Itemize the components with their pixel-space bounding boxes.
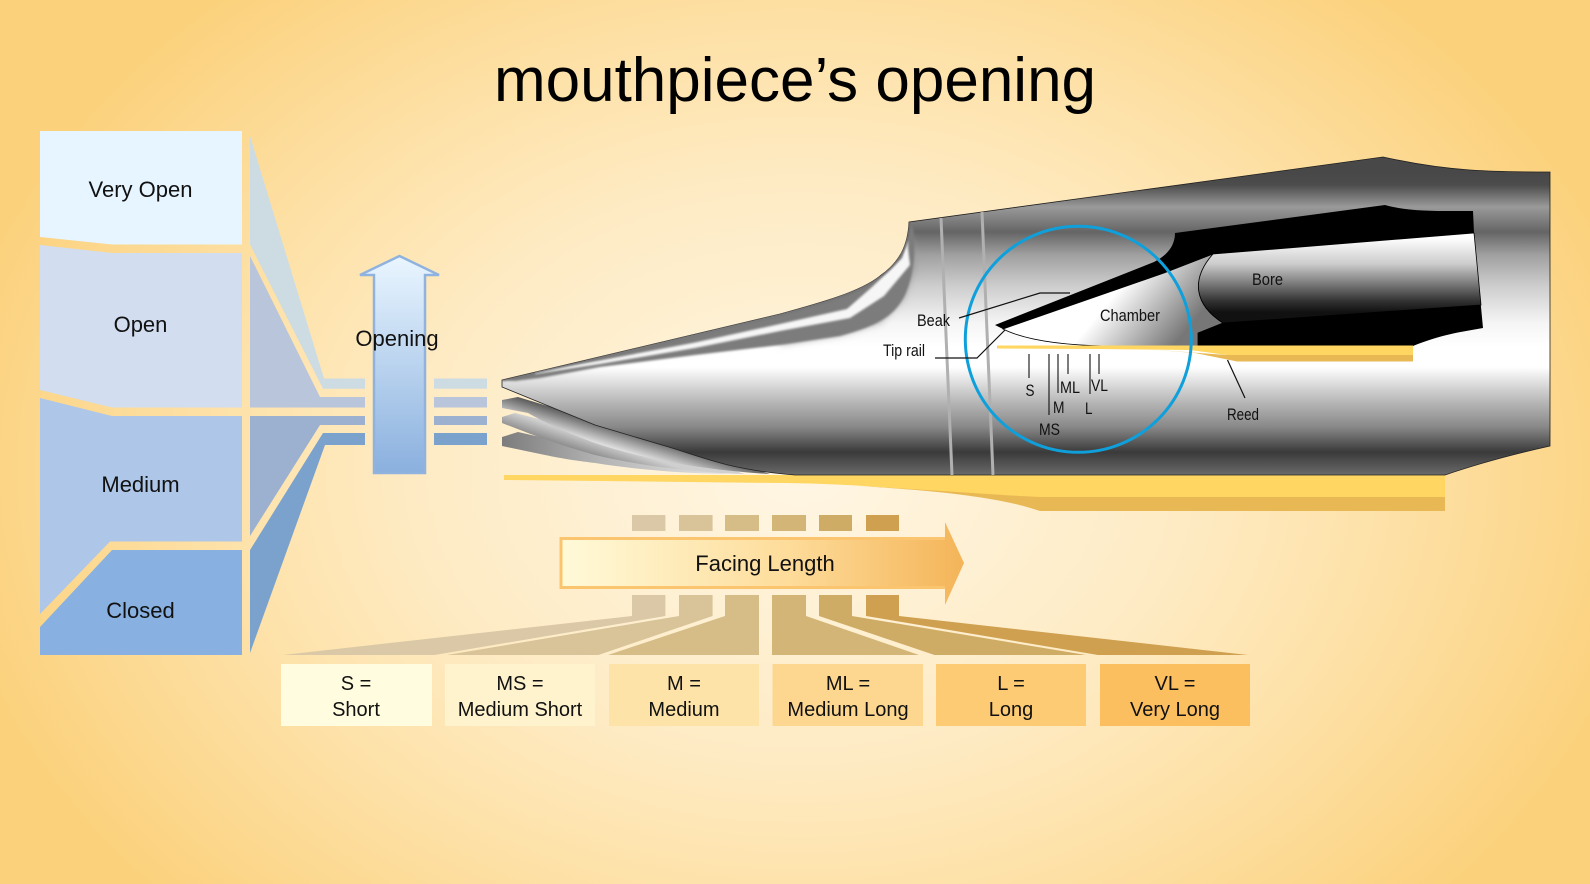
legend: short: S = <box>341 673 371 695</box>
legend: medium long: ML = <box>826 673 870 695</box>
level: open: Open <box>114 312 167 337</box>
arrow: facing length <box>561 522 964 605</box>
level: very open <box>40 131 242 244</box>
top squares <box>632 515 899 531</box>
level: closed <box>40 550 242 655</box>
chamber <box>1003 254 1223 346</box>
beak surface <box>502 222 915 381</box>
legend: medium long <box>772 664 923 726</box>
legend: long <box>936 664 1086 726</box>
arrow: opening: Opening <box>355 326 439 351</box>
legend: short: Short <box>332 699 380 721</box>
facing length ticks: ML <box>1060 378 1080 397</box>
reed: inner <box>997 346 1413 362</box>
callout: beak: Beak <box>917 311 950 330</box>
legend: very long: VL = <box>1155 673 1195 695</box>
legend: medium long: Medium Long <box>787 699 909 721</box>
level: very open: Very Open <box>89 177 192 202</box>
facing length ticks: M <box>1053 398 1064 417</box>
legend: medium: Medium <box>648 699 720 721</box>
legend: medium short: Medium Short <box>458 699 583 721</box>
callout: beak <box>917 293 1070 330</box>
facing length ticks: MS <box>1039 420 1060 439</box>
legend: long: Long <box>989 699 1033 721</box>
facing length ticks <box>1026 354 1108 439</box>
level: medium <box>40 398 242 614</box>
legend: medium short <box>445 664 595 726</box>
arrow: facing length: Facing Length <box>695 551 835 576</box>
facing length ticks: VL <box>1091 376 1108 395</box>
arrow: opening <box>355 256 439 473</box>
fan connectors <box>283 595 1248 655</box>
legend: medium <box>609 664 759 726</box>
level: medium: Medium <box>101 472 180 497</box>
legend: long: L = <box>997 673 1025 695</box>
level: open <box>40 245 242 408</box>
facing length ticks: L <box>1085 399 1092 418</box>
level: closed: Closed <box>106 598 175 623</box>
legend: short <box>281 664 432 726</box>
legend boxes <box>281 664 1250 726</box>
legend: medium short: MS = <box>496 673 544 695</box>
legend: very long: Very Long <box>1130 699 1220 721</box>
panel: opening levels <box>40 131 242 655</box>
callout: tip rail: Tip rail <box>883 341 925 360</box>
tip layers <box>502 397 770 474</box>
facing length ticks: S <box>1026 381 1034 400</box>
title: mouthpiece’s opening <box>494 46 1096 115</box>
legend: very long <box>1100 664 1250 726</box>
callout: reed <box>1227 360 1259 424</box>
funnel connectors <box>250 136 487 653</box>
bore <box>1198 233 1481 323</box>
reed: lower outer <box>504 475 1445 511</box>
callout: reed: Reed <box>1227 405 1259 424</box>
legend: medium: M = <box>667 673 701 695</box>
label: chamber: Chamber <box>1100 306 1160 325</box>
callout: tip rail <box>883 330 1005 360</box>
body grooves <box>941 218 952 475</box>
label: bore: Bore <box>1252 270 1283 289</box>
chamber walls <box>995 205 1483 346</box>
mouthpiece body <box>502 157 1550 475</box>
detail circle <box>965 226 1191 452</box>
